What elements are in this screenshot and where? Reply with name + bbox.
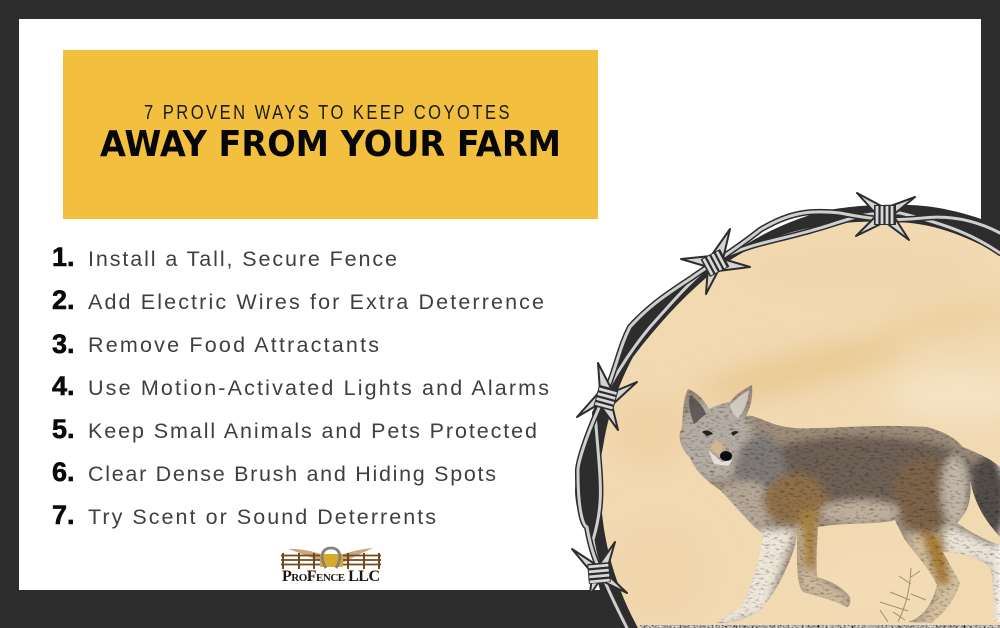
coyote photo disc: [580, 200, 1000, 628]
item 6: 6.: [52, 457, 75, 487]
item 4: 4.: [52, 371, 75, 401]
subtitle: 7 PROVEN WAYS TO KEEP COYOTES: [144, 102, 512, 124]
item 3: 3.: [52, 329, 75, 359]
ProFence LLC logo: ProFence LLC: [282, 568, 380, 585]
coyote: [670, 380, 1000, 628]
item 5: Keep Small Animals and Pets Protected: [88, 419, 537, 443]
item 2: Add Electric Wires for Extra Deterrence: [88, 290, 544, 314]
item 5: 5.: [52, 414, 75, 444]
barb: lower left: [572, 542, 627, 595]
item 2: 2.: [52, 285, 75, 315]
ground: [640, 625, 1000, 628]
item 6: Clear Dense Brush and Hiding Spots: [88, 462, 496, 486]
item 1: Install a Tall, Secure Fence: [88, 247, 397, 271]
barbed wire strands: [578, 212, 1000, 628]
item 7: 7.: [52, 500, 75, 530]
item 7: Try Scent or Sound Deterrents: [88, 505, 436, 529]
dark ring behind photo: [575, 205, 1000, 628]
item 4: Use Motion-Activated Lights and Alarms: [88, 376, 549, 400]
item 1: 1.: [52, 242, 75, 272]
item 3: Remove Food Attractants: [88, 333, 379, 357]
title banner: [63, 50, 598, 219]
coyote ears: [689, 395, 706, 424]
title: AWAY FROM YOUR FARM: [100, 124, 561, 165]
barb: upper left: [681, 229, 750, 294]
numbered list: [52, 242, 549, 530]
photo background: [580, 200, 1000, 628]
coyote face: [702, 431, 739, 436]
coyote fur body: [670, 380, 1000, 628]
barb: left: [577, 363, 637, 430]
dry plant: [880, 568, 926, 622]
ProFence LLC logo: [281, 548, 381, 585]
barb: top: [856, 193, 915, 240]
